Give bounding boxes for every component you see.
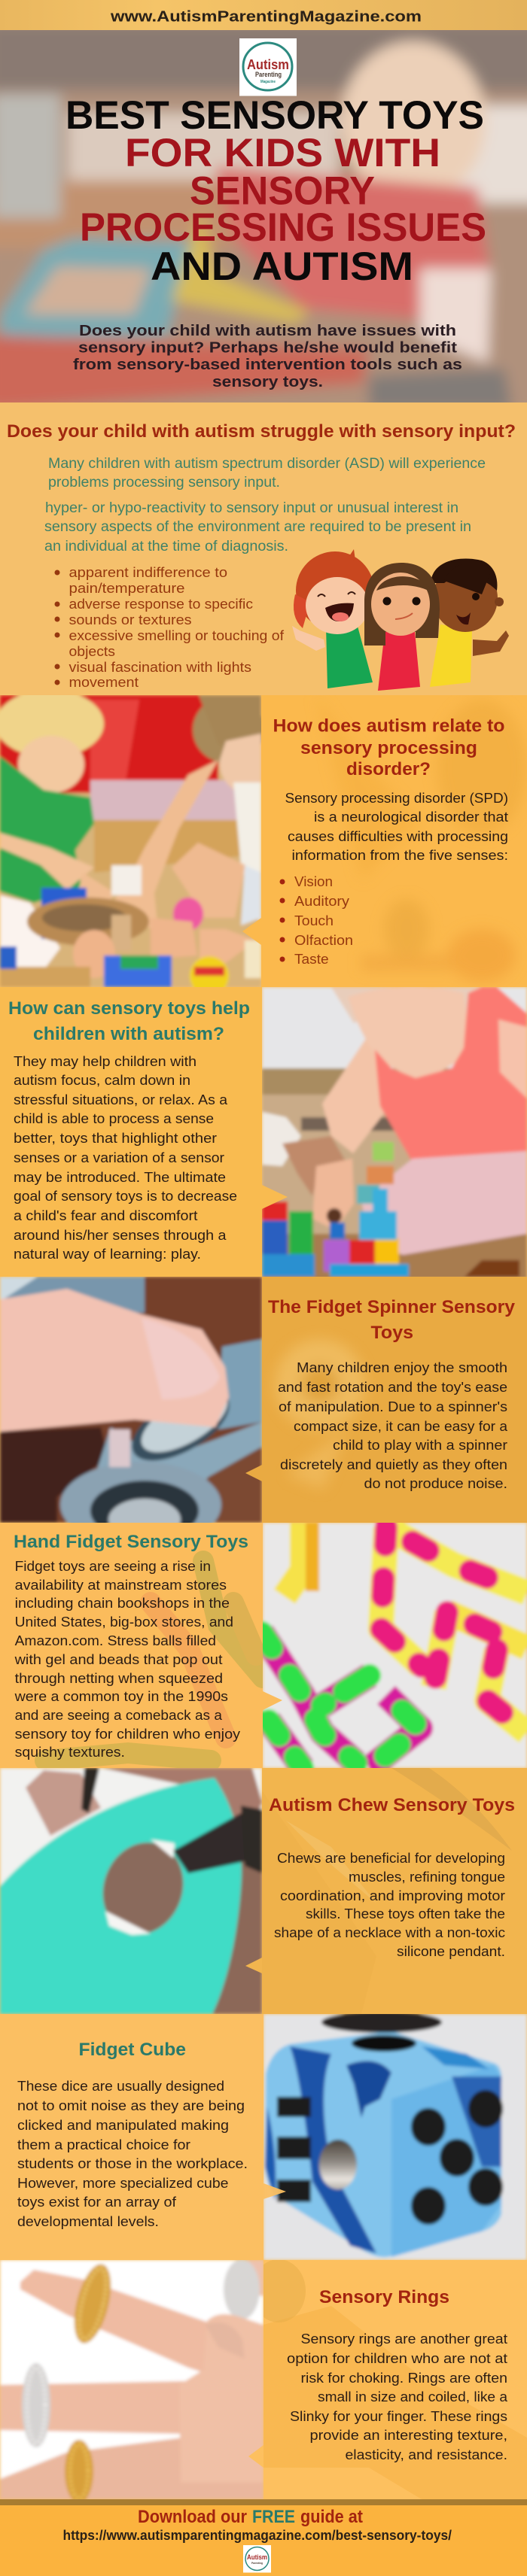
text: how toys help: natural way of learning: play. [14, 1246, 201, 1262]
arrow notch [245, 1465, 262, 1481]
text: ASD intro [44, 456, 486, 554]
panel: sensory rings [251, 2259, 527, 2499]
text: how toys help: goal of sensory toys is to decrease [14, 1188, 237, 1204]
intro paragraph: Does your child with autism have issues with [79, 323, 456, 339]
arrow notch [242, 918, 261, 945]
heading: how toys help: How can sensory toys help [8, 998, 250, 1019]
text: how toys help: stressful situations, or relax. As a [14, 1092, 228, 1107]
text: chew toys: skills. These toys often take the [306, 1906, 505, 1921]
heading: sensory rings: Sensory Rings [319, 2287, 449, 2307]
text: hand fidget: and are seeing a comeback as a [15, 1707, 223, 1723]
heading: chew toys: Autism Chew Sensory Toys [269, 1795, 515, 1815]
text: fidget spinner: Many children enjoy the smooth [297, 1359, 507, 1375]
text: ASD intro: problems processing sensory input. [48, 475, 280, 491]
text: chew toys: coordination, and improving motor [280, 1888, 505, 1903]
text: SPD definition: causes difficulties with processing [288, 828, 508, 844]
arrow notch [264, 2183, 286, 2199]
decorative watermark [337, 705, 522, 981]
hero photo background: toddler playing [0, 15, 527, 414]
text: sensory rings: elasticity, and resistance. [345, 2447, 507, 2462]
text: how toys help: autism focus, calm down in [14, 1072, 190, 1088]
text: how toys help: senses or a variation of a sensor [14, 1150, 224, 1165]
list: symptoms [54, 564, 285, 690]
text: hand fidget: were a common toy in the 1990s [14, 1688, 228, 1704]
text: chew toys: muscles, refining tongue [349, 1869, 505, 1885]
heading: autism and SPD: disorder? [346, 759, 431, 779]
text: SPD definition: information from the five senses: [292, 847, 508, 863]
text: fidget cube: students or those in the workplace. [17, 2155, 248, 2171]
title: AND AUTISM [151, 245, 413, 289]
panel: fidget cube [0, 2014, 264, 2260]
text: ASD intro: an individual at the time of diagnosis. [44, 539, 288, 554]
heading: autism and SPD [273, 716, 504, 779]
text: fidget spinner: compact size, it can be easy for a [294, 1418, 508, 1434]
text: hand fidget: through netting when squeezed [15, 1670, 223, 1686]
heading: fidget spinner: Toys [370, 1323, 413, 1343]
text: fidget cube [17, 2078, 248, 2229]
text: how toys help: They may help children with [14, 1053, 196, 1069]
intro paragraph: sensory input? Perhaps he/she would benefit [78, 340, 457, 357]
list: symptoms: adverse response to specific [69, 596, 253, 612]
text: fidget cube: not to omit noise as they are being [17, 2098, 245, 2113]
heading: hand fidget: Hand Fidget Sensory Toys [14, 1532, 248, 1552]
text: how toys help: may be introduced. The ultimate [14, 1169, 226, 1185]
intro paragraph: from sensory-based intervention tools such as [73, 357, 462, 373]
text: sensory rings: Slinky for your finger. These rings [290, 2408, 507, 2424]
text: fidget spinner: of manipulation. Due to a spinner's [279, 1399, 507, 1414]
text: sensory rings: small in size and coiled, like a [318, 2389, 508, 2404]
panel: the fidget spinner [262, 1277, 527, 1523]
text: hand fidget: sensory toy for children who enjoy [15, 1726, 241, 1742]
text: hand fidget: availability at mainstream stores [15, 1577, 227, 1593]
logo: Autism Parenting Magazine: Magazine [260, 80, 276, 84]
list: symptoms: objects [69, 643, 115, 659]
heading: download guide [138, 2507, 363, 2527]
title: PROCESSING ISSUES [80, 205, 486, 250]
photo: hand with sensory rings [0, 2259, 264, 2503]
top website bar [0, 0, 527, 30]
photo: plastic snake fidget chains [262, 1523, 527, 1768]
arrow notch [248, 2445, 264, 2468]
photo: children playing with blocks [0, 690, 265, 995]
decorative watermark [275, 1339, 365, 1490]
text: SPD definition: is a neurological disorder that [314, 809, 508, 825]
logo: small Autism Parenting Magazine: Parenting [251, 2561, 263, 2565]
text: fidget spinner: child to play with a spinner [333, 1437, 507, 1453]
title: FOR KIDS WITH [125, 131, 440, 175]
decorative watermark [45, 1561, 263, 1760]
list: five senses: Olfaction [294, 932, 353, 948]
logo: small Autism Parenting Magazine [243, 2545, 271, 2573]
heading: fidget spinner: The Fidget Spinner Sensory [268, 1297, 516, 1317]
heading: fidget spinner [268, 1297, 516, 1343]
text: how toys help [14, 1053, 237, 1262]
panel: hand fidget sensory toys [0, 1523, 263, 1768]
text: ASD intro: Many children with autism spectrum disorder (ASD) will experience [48, 456, 486, 472]
list: five senses: Touch [294, 913, 334, 928]
heading: fidget cube: Fidget Cube [78, 2040, 186, 2060]
text: ASD intro: sensory aspects of the environment are required to be present in [44, 519, 471, 535]
photo: blue camo fidget cube [264, 2012, 527, 2260]
text: sensory rings: Sensory rings are another great [301, 2331, 507, 2347]
panel: how can sensory toys help [0, 987, 262, 1277]
text: ASD intro: hyper- or hypo-reactivity to sensory input or unusual interest in [45, 500, 458, 516]
text: how toys help: a child's fear and discomfort [14, 1208, 197, 1223]
text: how toys help: better, toys that highlight other [14, 1130, 217, 1146]
heading: how toys help: children with autism? [33, 1024, 224, 1044]
heading: struggle with sensory input: Does your child with autism struggle with sensory input? [7, 421, 516, 442]
text: fidget spinner: do not produce noise. [364, 1475, 507, 1491]
text: chew toys: Chews are beneficial for developing [277, 1850, 505, 1866]
title: BEST SENSORY TOYS [65, 93, 484, 138]
text: hand fidget: Amazon.com. Stress balls filled [15, 1633, 216, 1648]
text: hand fidget: with gel and beads that pop out [14, 1651, 223, 1667]
top website bar: www.AutismParentingMagazine.com [110, 9, 422, 26]
text: SPD definition [285, 790, 508, 863]
text: fidget spinner: discretely and quietly as they often [280, 1457, 507, 1472]
text: sensory rings: option for children who are not at [287, 2350, 507, 2366]
arrow notch [262, 1185, 288, 1209]
list: symptoms: visual fascination with lights [69, 659, 251, 675]
photo: thumb on fidget spinner [0, 1277, 262, 1548]
heading: download guide: guide at [300, 2507, 363, 2527]
text: how toys help: around his/her senses through a [14, 1227, 227, 1243]
text: chew toys: silicone pendant. [397, 1943, 505, 1959]
text: fidget cube: developmental levels. [17, 2213, 159, 2229]
arrow notch [245, 1958, 262, 1973]
photo: girl playing with block train [262, 986, 527, 1279]
logo: Autism Parenting Magazine: Parenting [255, 71, 282, 78]
footer [0, 2499, 527, 2576]
photo: teal chew necklace pendant [0, 1768, 262, 2014]
text: fidget cube: clicked and manipulated making [17, 2117, 229, 2133]
panel: does your child struggle [0, 402, 527, 695]
link: guide URL: https://www.autismparentingmagazine.com/best-sensory-toys/ [63, 2528, 452, 2543]
list: five senses: Vision [294, 873, 333, 889]
text: hand fidget: Fidget toys are seeing a rise in [15, 1558, 211, 1574]
text: sensory rings: provide an interesting texture, [310, 2427, 507, 2443]
intro paragraph: sensory toys. [212, 374, 323, 390]
text: hand fidget: squishy textures. [15, 1744, 125, 1760]
decorative watermark [251, 2259, 527, 2499]
heading: autism and SPD: sensory processing [300, 738, 477, 758]
logo: small Autism Parenting Magazine: Autism [247, 2553, 267, 2561]
logo: Autism Parenting Magazine [239, 38, 297, 96]
list: symptoms: movement [69, 674, 139, 690]
panel: autism chew sensory toys [262, 1768, 527, 2014]
panel: how does autism relate to SPD [261, 695, 527, 987]
list: five senses [280, 873, 353, 967]
list: symptoms: sounds or textures [69, 612, 191, 627]
list: symptoms: pain/temperature [69, 580, 185, 596]
list: symptoms: excessive smelling or touching of [69, 627, 285, 643]
list: five senses: Taste [294, 951, 329, 967]
text: hand fidget: United States, big-box stores, and [15, 1614, 233, 1630]
text: chew toys: shape of a necklace with a non-toxic [274, 1924, 505, 1940]
title: SENSORY [190, 169, 375, 214]
list: five senses: Auditory [294, 893, 350, 909]
text: SPD definition: Sensory processing disorder (SPD) [285, 790, 508, 806]
text: how toys help: child is able to process a sense [14, 1110, 214, 1126]
text: sensory rings: risk for choking. Rings are often [301, 2370, 507, 2386]
text: chew toys [274, 1850, 505, 1959]
title [65, 93, 486, 289]
text: fidget spinner: and fast rotation and the toy's ease [278, 1379, 507, 1395]
logo: Autism Parenting Magazine: Autism [247, 57, 289, 72]
icon: three cartoon kids [292, 549, 509, 691]
text: fidget spinner [278, 1359, 508, 1491]
heading: how toys help [8, 998, 250, 1044]
heading: download guide: FREE [252, 2507, 295, 2527]
text: hand fidget [14, 1558, 241, 1760]
text: hand fidget: including chain bookshops in the [15, 1595, 230, 1611]
heading: autism and SPD: How does autism relate to [273, 716, 504, 737]
text: sensory rings [287, 2331, 508, 2462]
decorative watermark [286, 1768, 512, 1903]
text: fidget cube: toys exist for an array of [17, 2194, 177, 2210]
intro paragraph [73, 323, 462, 390]
arrow notch [263, 1691, 282, 1710]
text: fidget cube: them a practical choice for [17, 2137, 190, 2152]
list: symptoms: apparent indifference to [69, 564, 227, 580]
heading: download guide: Download our [138, 2507, 247, 2527]
text: fidget cube: These dice are usually designed [17, 2078, 224, 2094]
text: fidget cube: However, more specialized cube [17, 2175, 229, 2191]
